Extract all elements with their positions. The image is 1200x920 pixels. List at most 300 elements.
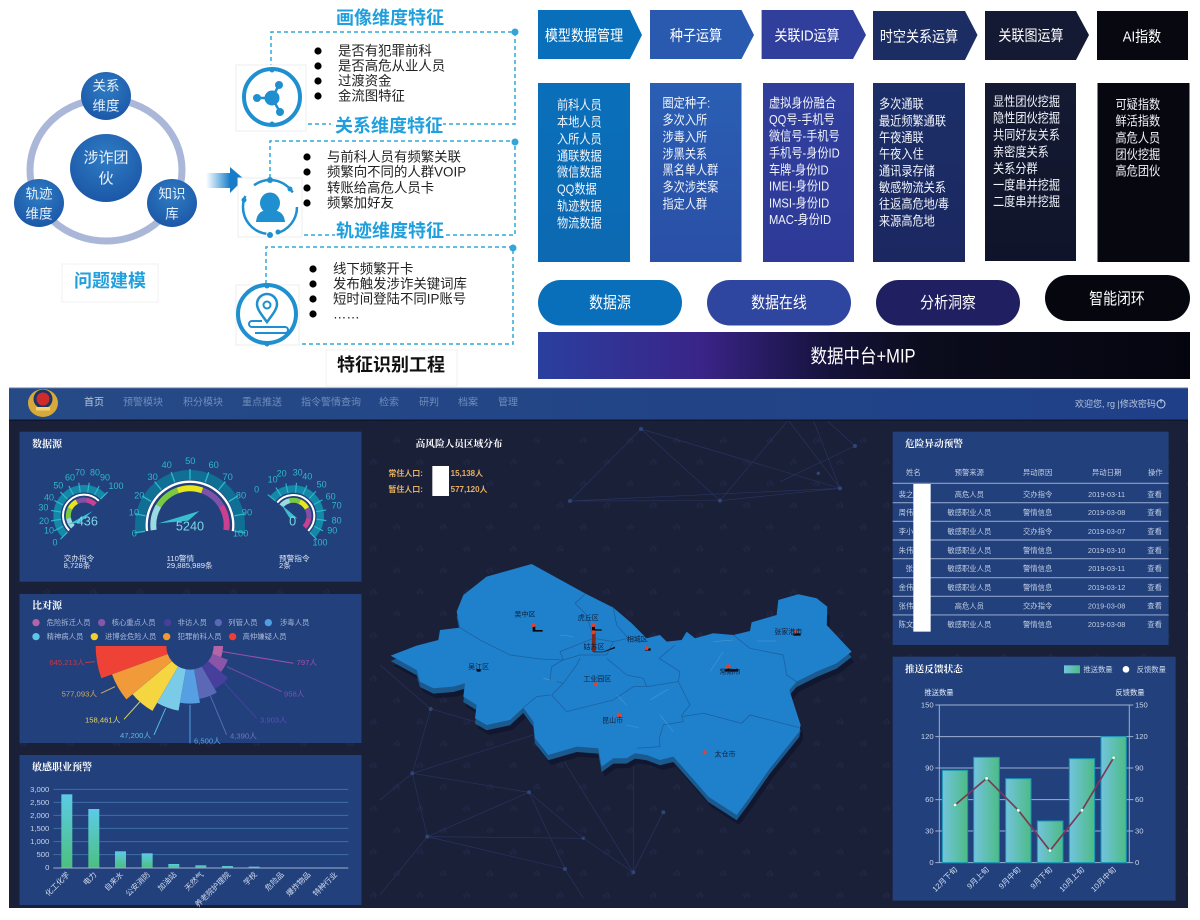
pill: data source: 数据源 [589,294,631,312]
leader lines [85,652,293,743]
column: AI indexes [1098,83,1190,262]
navigation bar [9,387,1188,421]
map: district labels: 常熟市 [719,667,740,676]
legend: 反馈数量 [1137,665,1166,674]
value labels: 4,390人 [230,731,257,740]
axis labels: 120 [1135,732,1148,741]
table rows: 高危人员 [955,490,984,499]
column: relation graph: 关系分群 [993,161,1038,176]
table header: 操作 [1148,468,1163,477]
axis labels: 90 [925,763,934,772]
gauge: 110 incidents: 110警情 [167,553,195,563]
gauge: assigned instructions: 0 [52,538,57,548]
gauge: early warning instructions: 0 [254,484,259,494]
dashed frame [270,141,515,235]
gauge: assigned instructions: 20 [39,516,49,526]
node: trajectory dimension: 维度 [26,206,52,222]
step 4: 时空关系运算 [880,27,958,45]
gauge: 110 incidents: 5240 [176,520,204,534]
column: AI indexes: 团伙挖掘 [1116,146,1160,162]
map: district labels: 太仓市 [714,749,735,758]
table rows: 2019-03-12 [1088,583,1125,592]
map: flow streaks [543,635,777,732]
platform bar: data middle platform: 数据中台+MIP [810,345,916,367]
dashboard [9,387,1188,909]
step 3 [762,10,866,59]
redaction block [913,484,931,632]
arrow: modelling to feature engineering [206,167,244,193]
gauge: early warning instructions: 80 [332,516,342,526]
column: data sources: 轨迹数据 [557,197,602,214]
node: centre fraud gang: 伙 [98,170,114,188]
legend: 核心重点人员 [112,618,156,627]
axis titles: 反馈数量 [1115,688,1145,697]
column: linked IDs [763,83,854,262]
map: district extrusion shadow [393,574,854,825]
gauge: assigned instructions [38,467,123,570]
column: data sources [538,83,630,262]
bullet list: 转账给高危人员卡 [327,180,434,196]
node: trajectory dimension: 轨迹 [26,186,53,202]
column: linked IDs: 虚拟身份融合 [769,94,836,111]
gauge: early warning instructions: 90 [327,526,337,536]
y axis labels: 2,000 [30,811,49,820]
step 2 [650,10,754,59]
value labels: 645,213人 [49,658,85,667]
gauge: early warning instructions: 10 [268,474,278,484]
heading: 关系维度特征 [335,115,443,136]
step 4 [873,11,978,60]
y axis labels [30,785,49,872]
x axis labels: 爆炸物品 [284,869,313,898]
bullet list [303,148,466,210]
x axis labels: 10月中旬 [1088,864,1118,894]
heading: 敏感职业预警 [32,760,92,774]
line series [953,756,1115,852]
map: district labels: 虎丘区 [578,613,599,622]
value labels [49,658,317,745]
column: linked IDs: 车牌-身份ID [769,161,829,178]
node: knowledge base: 库 [165,206,179,222]
table rows: 敏感职业人员 [947,546,991,555]
table rows: 2019-03-08 [1088,620,1125,629]
column: AI indexes: 鲜活指数 [1116,112,1160,129]
icon: network nodes [236,65,306,131]
menu items: 检索 [379,396,399,408]
gauge: 110 incidents: 100 [233,528,248,538]
column: seeds: 多次涉类案 [662,178,718,195]
axis labels: 0 [1135,858,1139,867]
table rows: 交办指令 [1023,601,1053,610]
column: relation graph: 隐性团伙挖掘 [993,109,1060,126]
legend: 犯罪前科人员 [178,632,222,641]
column: AI indexes: 可疑指数 [1116,96,1160,112]
column: spatio-temporal: 午夜入住 [879,145,924,162]
map: district labels: 吴中区 [515,609,535,618]
column: relation graph [985,83,1076,261]
step 1: 模型数据管理 [545,26,623,44]
value labels: 158,461人 [85,715,121,724]
map: district labels [468,609,802,758]
map: district borders [460,594,799,748]
table rows: 警情信息 [1023,546,1052,555]
heading: 危险异动预警 [905,438,963,450]
axis titles: 推送数量 [924,688,954,697]
heading: 轨迹维度特征 [336,220,444,241]
value labels: 797人 [297,658,317,667]
column: linked IDs: QQ号-手机号 [769,112,835,127]
menu items: 指令警情查询 [301,396,361,408]
legend: 推送数量 [1083,665,1113,674]
y axis labels: 2,500 [30,798,49,807]
bullet list: …… [333,306,360,322]
table rows: 敏感职业人员 [947,527,991,536]
x axis labels: 12月下旬 [930,864,959,894]
node: knowledge base [147,179,197,227]
gauge: assigned instructions: 40 [44,492,54,502]
bullet list: 过渡资金 [338,74,392,88]
y axis labels: 0 [45,863,49,872]
gauge: early warning instructions: 预警指令 [279,553,310,563]
node: knowledge base: 知识 [158,186,186,202]
gauge: assigned instructions: 10 [44,526,54,536]
table header: 异动原因 [1023,468,1052,477]
table rows: 高危人员 [955,601,984,610]
axis labels: 90 [1135,763,1144,772]
bullet list: 发布触发涉诈关键词库 [333,276,467,292]
bullet list: 是否有犯罪前科 [338,42,432,58]
watermark and network backdrop [9,420,1188,905]
column: data sources: 本地人员 [557,114,602,130]
gauge: early warning instructions [254,468,342,570]
column: relation graph: 共同好友关系 [993,127,1060,143]
table rows: 警情信息 [1023,564,1052,573]
population stats: 暂住人口: [388,484,423,494]
table header: 预警来源 [955,468,985,477]
legend: 进博会危险人员 [105,632,156,641]
column: data sources: 物流数据 [557,214,602,231]
map: district surface [391,564,852,815]
panel: high-risk personnel map [388,438,854,825]
table rows: 查看 [1147,564,1162,573]
value labels: 3,903人 [260,715,287,724]
gauge: early warning instructions: 2条 [279,560,291,570]
menu items: 首页 [84,396,104,408]
column: seeds: 指定人群 [662,195,707,212]
frame end dot [512,138,518,146]
table rows: 张 [906,564,914,573]
table rows: 敏感职业人员 [947,620,991,629]
column: relation graph: 亲密度关系 [993,143,1049,160]
table rows: 查看 [1147,546,1162,555]
map: district labels: 昆山市 [602,715,623,724]
column: spatio-temporal: 敏感物流关系 [879,179,946,195]
heading: 高风险人员区域分布 [416,438,503,450]
column: spatio-temporal: 往返高危地/毒 [879,195,949,212]
column: spatio-temporal: 午夜通联 [879,129,924,145]
x axis labels: 特种行业 [310,869,339,898]
column: AI indexes: 高危人员 [1116,129,1160,146]
panel: relation dimension features [238,115,518,238]
value labels: 577,093人 [62,689,97,698]
axis labels [921,700,1148,867]
column: linked IDs: MAC-身份ID [769,211,831,227]
column: spatio-temporal: 多次通联 [879,96,924,112]
column: data sources: 前科人员 [557,96,602,113]
table rows: 周伟 [899,508,913,517]
pill: analysis insight: 分析洞察 [920,293,976,312]
population stats: 15,138人 [451,469,483,478]
x axis labels: 养老院护理院 [193,869,232,909]
node: relation dimension: 维度 [92,98,120,114]
step 6 [1097,11,1188,60]
table rows: 李小 [899,527,914,536]
table rows: 陈文 [899,620,914,629]
panel: risk anomaly alert table [893,432,1169,645]
column: relation graph: 二度串并挖掘 [993,193,1060,209]
table rows: 张伟 [899,601,913,610]
user info: 欢迎您, rg |修改密码 [1075,398,1156,409]
frame end dot [512,28,518,36]
column: spatio-temporal: 来源高危地 [879,212,935,229]
gauge: assigned instructions: 8,728条 [64,560,91,570]
table rows: 警情信息 [1023,508,1052,517]
column: linked IDs: 微信号-手机号 [769,128,840,144]
table rows: 金伟 [899,583,913,592]
heading: 比对源 [32,599,63,612]
bullet list [309,262,467,322]
column: seeds: 涉毒入所 [662,129,707,145]
heading: feature recognition engineering [326,350,457,386]
table rows: 查看 [1147,508,1162,517]
heading: problem modelling: 问题建模 [74,271,146,291]
gauge: 110 incidents: 40 [161,460,172,470]
table rows: 2019-03-08 [1088,601,1125,610]
x axis labels [43,869,339,909]
x axis labels: 9月下旬 [1028,864,1054,891]
table rows [899,490,1162,629]
bullet list: 频繁加好友 [327,196,394,210]
axis labels: 150 [921,700,934,709]
legend [32,618,309,641]
axis labels: 150 [1135,700,1148,709]
bullet list: 与前科人员有频繁关联 [327,148,461,164]
panel: problem modelling [14,72,197,302]
x axis labels: 9月上旬 [965,864,991,891]
gauge: early warning instructions: 20 [277,468,287,478]
table rows: 交办指令 [1023,490,1053,499]
column: linked IDs: IMSI-身份ID [769,194,829,211]
bullet list [314,42,445,104]
x axis labels: 10月上旬 [1057,864,1086,894]
legend: 列管人员 [228,618,258,627]
menu items: 积分模块 [183,396,223,408]
row separators [893,483,1169,615]
dashed frame [271,32,515,124]
legend: 高仲嫌疑人员 [243,632,287,641]
menu items [84,396,518,408]
gauge: 110 incidents: 29,885,989条 [167,560,213,570]
menu items: 档案 [458,396,478,408]
population stats: 577,120人 [451,485,488,494]
step 6: AI指数 [1123,27,1161,45]
table rows: 敏感职业人员 [947,564,991,573]
gauge: assigned instructions: 80 [90,468,100,478]
column: linked IDs: 手机号-身份ID [769,144,840,161]
value labels: 958人 [284,689,305,698]
x axis labels: 公安消防 [123,869,152,898]
step 3: 关联ID运算 [774,26,840,44]
table rows: 朱伟 [899,546,913,555]
gauge: 110 incidents: 80 [236,490,246,500]
dashed frame [266,247,513,344]
gauge: early warning instructions: 0 [289,515,296,529]
menu items: 预警模块 [123,396,163,408]
gauge: 110 incidents: 20 [134,491,145,501]
menu items: 研判 [419,396,439,408]
legend: 非访人员 [178,618,207,627]
map: district labels: 相城区 [627,634,648,643]
column: data sources: 微信数据 [557,163,602,180]
step 5: 关联图运算 [998,26,1064,44]
x axis labels: 电力 [81,869,99,887]
step 5 [985,11,1089,60]
value labels: 6,500人 [194,736,221,745]
gauge: assigned instructions: 436 [77,515,98,529]
gauge: 110 incidents: 70 [222,472,233,482]
dashboard background [9,388,1188,908]
x axis labels: 危险品 [262,869,286,893]
table rows: 查看 [1147,490,1162,499]
panel: trajectory dimension features [236,220,516,346]
panel: comparison source rose chart [20,570,362,745]
gauge: assigned instructions: 90 [100,472,110,482]
x axis labels [930,864,1118,894]
map: district labels: 张家港市 [774,627,802,636]
grid and axes [935,705,1133,863]
table rows: 2019-03-07 [1088,527,1125,536]
map: district labels: 工业园区 [583,674,611,683]
table rows: 查看 [1147,527,1162,536]
population stats [388,466,488,496]
table rows: 警情信息 [1023,620,1052,629]
column: seeds [650,83,742,262]
process columns [538,83,1190,262]
column: data sources: 入所人员 [557,131,602,147]
table rows: 敏感职业人员 [947,508,991,517]
pill: data online [707,280,851,326]
table rows: 敏感职业人员 [947,583,991,592]
table header: 异动日期 [1092,468,1121,477]
pill: intelligent loop: 智能闭环 [1089,289,1145,308]
gauge: early warning instructions: 70 [332,501,342,511]
column: AI indexes: 高危团伙 [1116,162,1160,179]
legend: 涉毒人员 [280,618,309,627]
node: relation dimension: 关系 [92,78,120,94]
population stats: 常住人口: [388,468,423,478]
table header [906,468,1163,477]
gauge: assigned instructions: 100 [108,481,123,491]
gauge: assigned instructions: 70 [75,467,85,477]
map: district labels: 吴江区 [468,663,489,671]
axis labels: 60 [925,795,934,804]
gauge: early warning instructions: 30 [293,468,303,478]
heading: problem modelling [62,264,158,302]
heading: 推送反馈状态 [905,663,964,675]
x axis [53,866,348,869]
map: district labels: 姑苏区 [583,642,604,651]
gauge: assigned instructions: 交办指令 [64,553,95,563]
legend: 精神病人员 [47,632,83,641]
grid lines [53,789,348,855]
pill: data online: 数据在线 [751,294,807,312]
menu items: 管理 [498,396,518,408]
icon: location pin [236,284,299,346]
x axis labels: 自来水 [102,869,125,893]
axis labels: 30 [925,826,934,835]
process header chevrons [538,10,1188,60]
axis labels: 0 [929,858,934,867]
bullet list: 是否高危从业人员 [338,58,445,74]
node: centre fraud gang: 涉诈团 [83,150,129,166]
table rows: 警情信息 [1023,583,1052,592]
gauge: assigned instructions: 50 [53,481,63,491]
table rows: 2019-03-11 [1088,564,1125,573]
x axis labels: 加油站 [155,869,179,893]
bullet list: 金流图特征 [338,88,405,104]
gauge: assigned instructions: 30 [38,502,48,512]
step 1 [538,10,642,59]
pill: analysis insight [876,280,1020,326]
value labels: 47,200人 [120,731,151,740]
column: seeds: 黑名单人群 [662,161,718,178]
chart: rose wedges [114,570,266,722]
node: trajectory dimension [14,179,64,227]
menu items: 重点推送 [242,396,282,408]
legend: 危险拆迁人员 [47,618,91,627]
table rows: 交办指令 [1023,527,1053,536]
node: relation dimension [81,72,131,120]
heading: 数据源 [32,438,63,450]
y axis labels: 1,500 [30,824,49,833]
map: district extrusion [391,569,852,820]
panel: data source gauges [20,432,362,582]
bullet list: 线下频繁开卡 [333,262,413,276]
gauge: 110 incidents: 0 [132,528,137,538]
gauge: 110 incidents: 60 [208,460,219,470]
column: spatio-temporal [873,83,965,262]
column: seeds: 多次入所 [662,112,707,128]
table rows: 查看 [1147,601,1162,610]
x axis labels: 天然气 [182,869,206,893]
x axis labels: 9月中旬 [996,864,1023,891]
step 2: 种子运算 [670,26,722,44]
panel: sensitive occupation warning bar chart [20,755,362,909]
axis labels: 30 [1135,826,1144,835]
column: relation graph: 一度串并挖掘 [993,176,1060,193]
column: relation graph: 显性团伙挖掘 [993,93,1060,109]
column: seeds: 涉黑关系 [662,146,707,162]
gauge: 110 incidents: 30 [147,472,158,482]
table rows: 查看 [1147,620,1162,629]
y axis labels: 3,000 [30,785,49,794]
bars [942,737,1126,863]
heading: 画像维度特征 [336,8,444,28]
x axis labels: 学校 [241,869,259,887]
column: data sources: QQ数据 [557,180,597,197]
table rows: 查看 [1147,583,1162,592]
column: seeds: 圈定种子: [662,94,710,111]
